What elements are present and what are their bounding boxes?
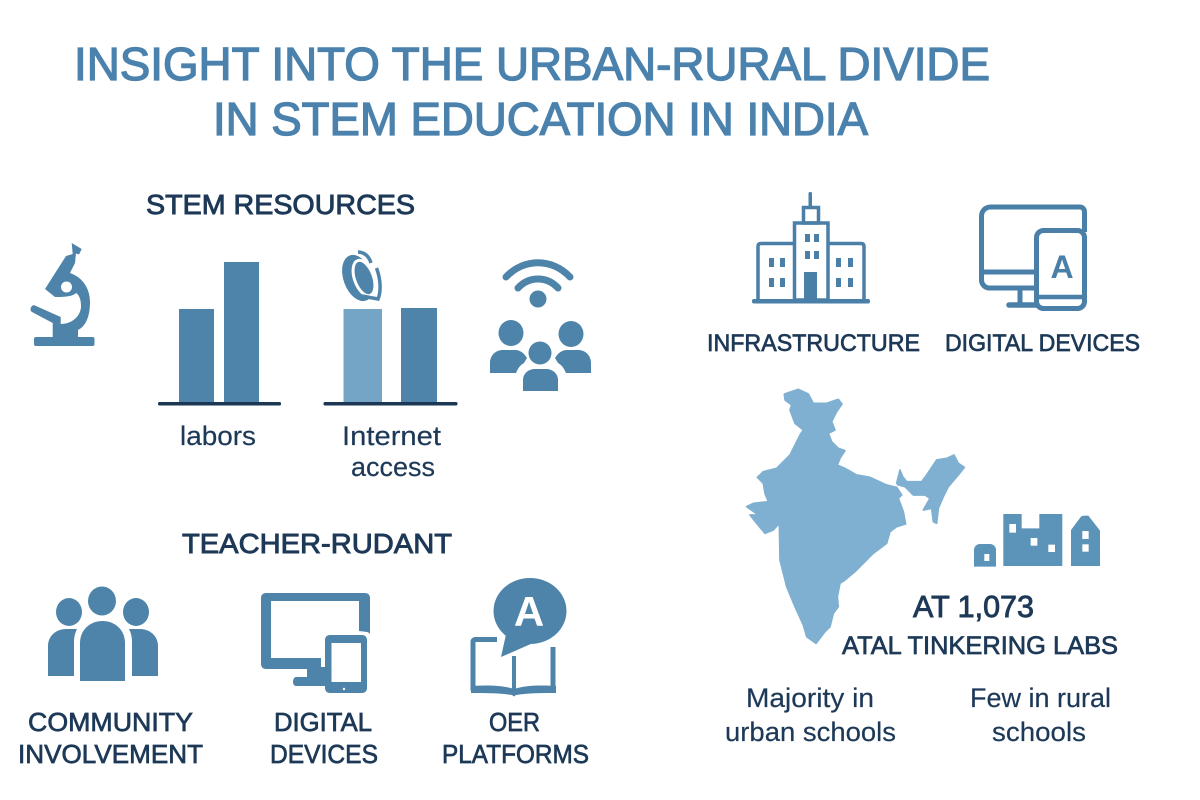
text: few in rural schools: schools xyxy=(992,717,1086,747)
statistic: 1,073: AT 1,073 xyxy=(913,589,1034,624)
text: majority in urban schools: urban schools xyxy=(725,717,896,747)
bar chart: internet access xyxy=(324,308,458,406)
heading: teacher-rudant: TEACHER-RUDANT xyxy=(182,528,452,559)
label: OER platforms: OER xyxy=(489,707,540,737)
label: internet access: Internet xyxy=(342,421,442,451)
panel: teacher-rudant xyxy=(18,528,589,769)
label: internet access xyxy=(342,421,442,482)
label: infrastructure: INFRASTRUCTURE xyxy=(707,330,920,357)
text: few in rural schools xyxy=(970,683,1111,747)
icon: wifi and group xyxy=(490,263,591,391)
label: OER platforms: PLATFORMS xyxy=(442,739,589,769)
text: majority in urban schools xyxy=(725,683,896,747)
bar chart: labors xyxy=(158,262,281,406)
panel: Atal Tinkering Labs xyxy=(725,389,1118,747)
icon: monitor and tablet with letter A: A xyxy=(1050,249,1074,285)
text: few in rural schools: Few in rural xyxy=(970,683,1111,713)
icon: swirl symbol xyxy=(336,250,380,306)
label: digital devices: DEVICES xyxy=(270,739,378,769)
text: majority in urban schools: Majority in xyxy=(746,683,874,713)
label: community involvement xyxy=(18,707,203,769)
label: OER platforms xyxy=(442,707,589,769)
icon: community group xyxy=(48,586,158,681)
label: digital devices: DIGITAL xyxy=(274,707,372,737)
label: community involvement: COMMUNITY xyxy=(28,707,193,737)
panel: infrastructure and devices xyxy=(707,192,1140,357)
icon: open book with speech bubble xyxy=(471,578,566,696)
icon: microscope xyxy=(30,243,94,346)
icon: school building xyxy=(752,192,870,304)
icon: open book with speech bubble: A xyxy=(514,588,544,635)
title xyxy=(74,38,990,145)
label: digital devices: DIGITAL DEVICES xyxy=(945,330,1140,357)
title: IN STEM EDUCATION IN INDIA xyxy=(213,93,868,145)
heading: STEM resources: STEM RESOURCES xyxy=(146,189,415,220)
label: digital devices xyxy=(270,707,378,769)
title: INSIGHT INTO THE URBAN-RURAL DIVIDE xyxy=(74,38,990,90)
label: community involvement: INVOLVEMENT xyxy=(18,739,203,769)
icon: monitor and tablet xyxy=(261,593,370,693)
panel: STEM resources xyxy=(30,189,591,482)
icon: small buildings xyxy=(974,514,1100,567)
map: India xyxy=(747,389,964,643)
label: Atal Tinkering Labs: ATAL TINKERING LABS xyxy=(842,632,1118,660)
icon: monitor and tablet with letter A xyxy=(982,207,1085,308)
label: internet access: access xyxy=(351,452,435,482)
label: labors: labors xyxy=(180,421,256,451)
